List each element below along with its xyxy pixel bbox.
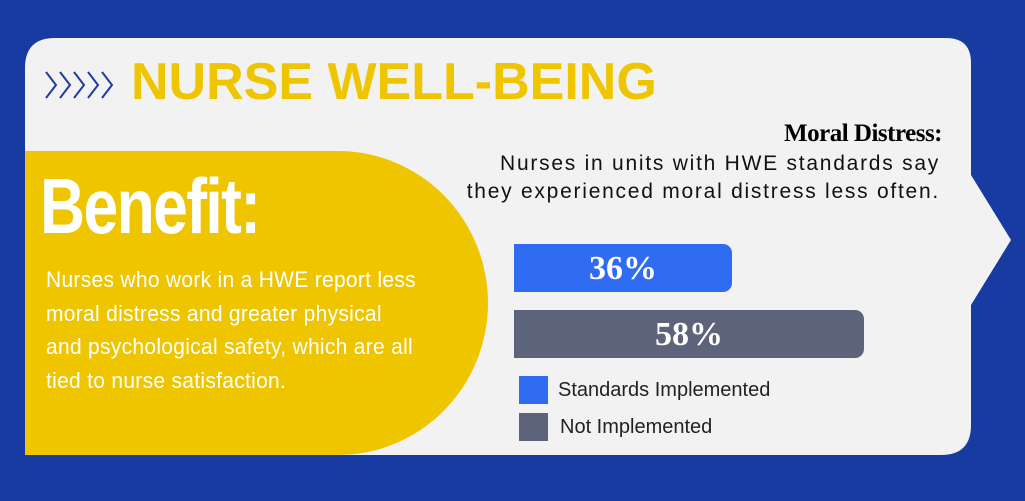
- bar: not implemented 58%: [514, 310, 864, 358]
- bar: not implemented 58%: 58%: [655, 316, 723, 353]
- legend item: not implemented: [519, 413, 712, 441]
- legend item: standards implemented: Standards Implemented: [558, 379, 770, 401]
- text block: moral distress description: they experienced moral distress less often.: [467, 180, 940, 203]
- bar chart: [514, 244, 864, 358]
- heading: Benefit: Benefit:: [40, 162, 259, 250]
- bar: standards implemented 36%: [514, 244, 732, 292]
- legend item: not implemented: Not Implemented: [560, 416, 712, 438]
- text block: benefit description: tied to nurse satisfaction.: [46, 368, 286, 392]
- bar: standards implemented 36%: 36%: [589, 250, 657, 287]
- icon: chevrons: [45, 71, 114, 99]
- text block: benefit description: and psychological safety, which are all: [46, 334, 413, 359]
- text block: benefit description: Nurses who work in a HWE report less: [46, 267, 416, 292]
- heading: Moral Distress: Moral Distress:: [784, 120, 942, 147]
- text block: benefit description: [46, 267, 416, 392]
- text block: moral distress description: Nurses in units with HWE standards say: [500, 152, 940, 175]
- legend: [519, 376, 770, 441]
- text block: moral distress description: [467, 152, 940, 203]
- title: NURSE WELL-BEING: [131, 53, 657, 111]
- legend item: standards implemented: [519, 376, 770, 404]
- text block: benefit description: moral distress and greater physical: [46, 300, 382, 326]
